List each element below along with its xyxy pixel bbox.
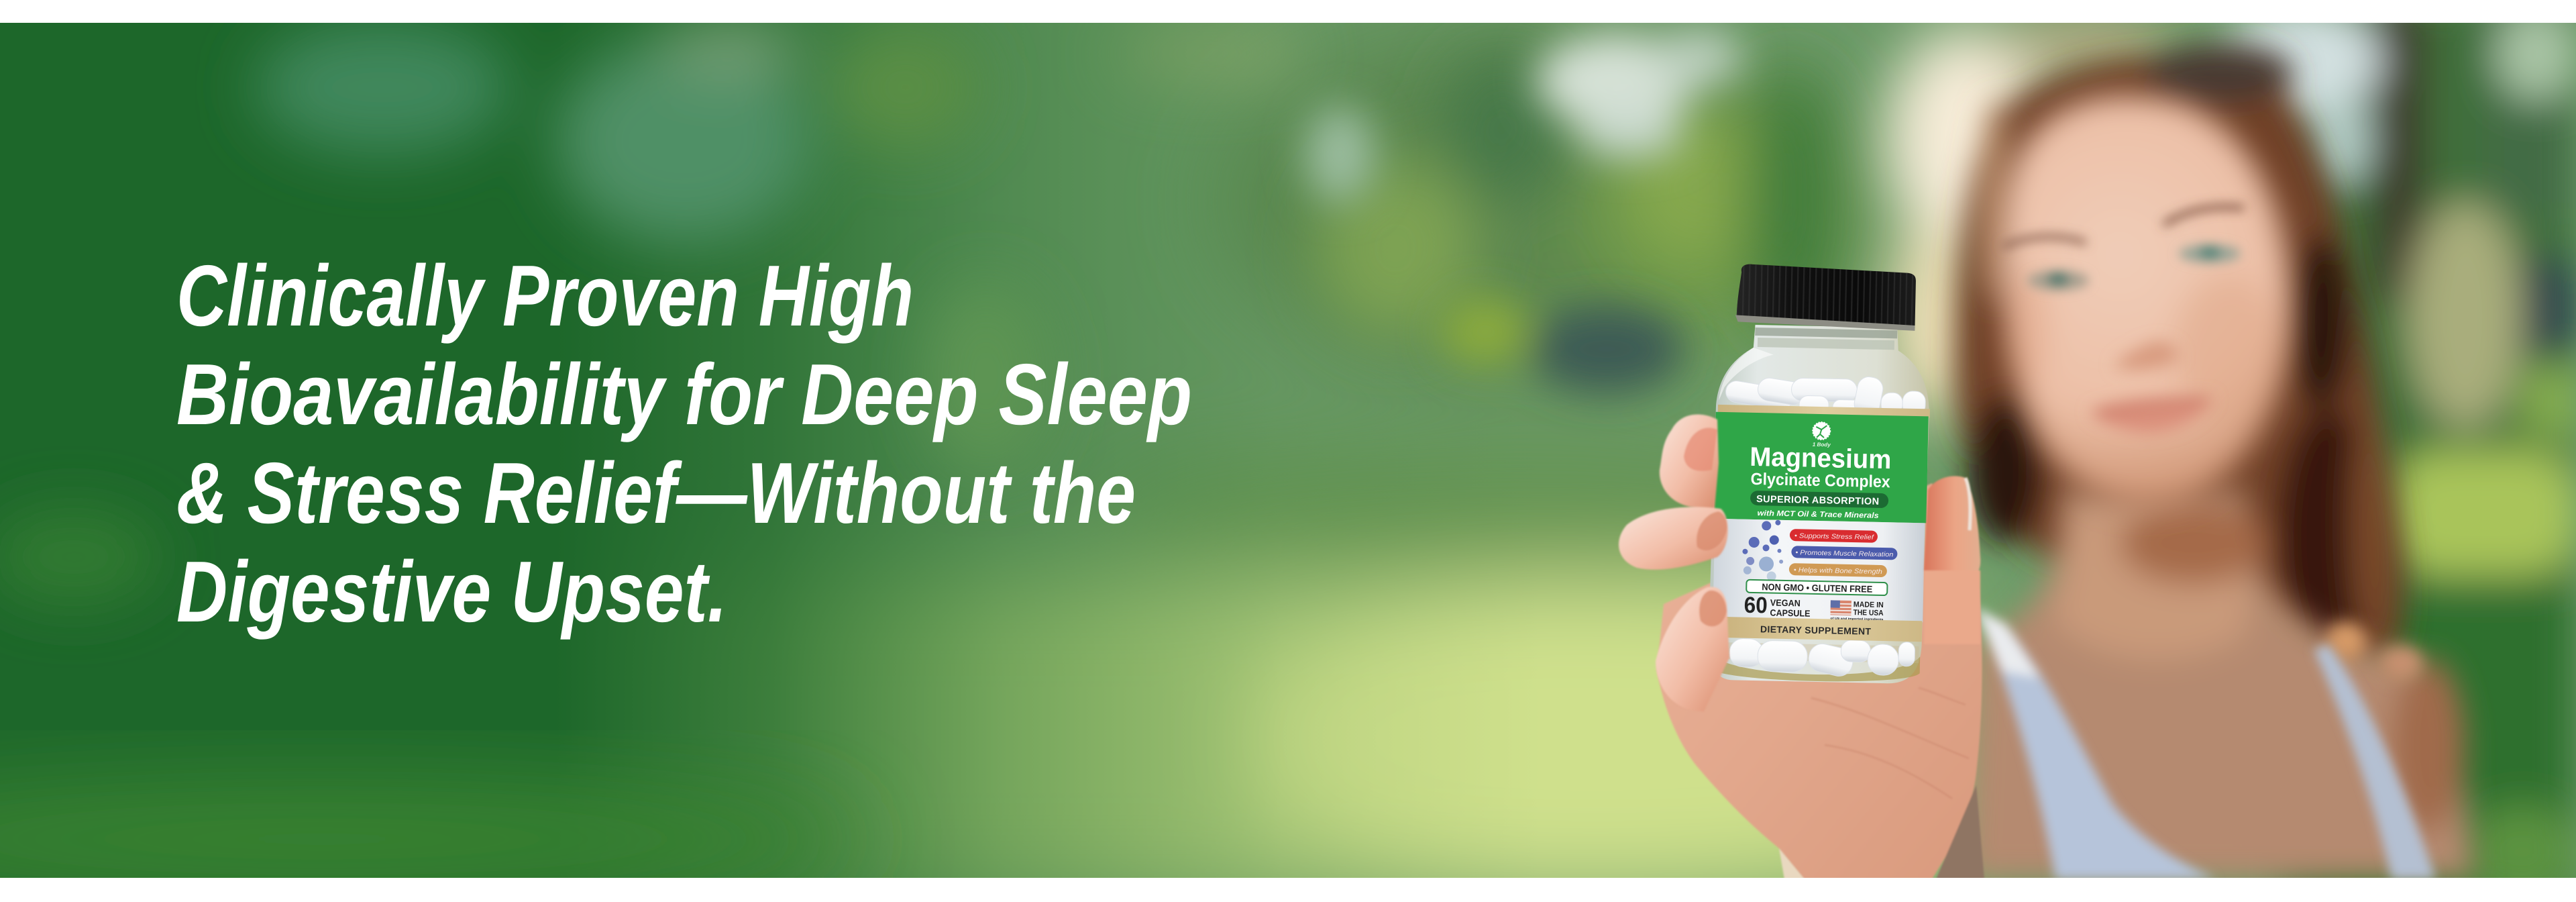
subtitle: with MCT Oil & Trace Minerals bbox=[1757, 509, 1879, 520]
eyes and brows bbox=[2002, 207, 2244, 291]
index finger bbox=[1660, 414, 1719, 508]
label bbox=[1711, 405, 1930, 642]
face bbox=[2001, 96, 2291, 506]
hair bbox=[1955, 44, 2404, 671]
headline: Digestive Upset. bbox=[176, 544, 727, 640]
benefit pills: • Helps with Bone Strength bbox=[1794, 566, 1882, 576]
nose and mouth bbox=[2090, 342, 2214, 433]
middle finger bbox=[1619, 507, 1728, 570]
capsules top bbox=[1724, 372, 1926, 419]
benefit pills: • Promotes Muscle Relaxation bbox=[1795, 549, 1894, 558]
supplement bottle bbox=[1707, 264, 1933, 684]
capsules bottom bbox=[1729, 638, 1915, 680]
usa flag and made in usa: MADE IN bbox=[1854, 601, 1884, 609]
white tank top bbox=[1975, 607, 2436, 879]
headline bbox=[176, 248, 1192, 640]
headline: Bioavailability for Deep Sleep bbox=[176, 346, 1192, 443]
shoulders and neck bbox=[1966, 490, 2475, 879]
thumb bbox=[1924, 476, 1980, 583]
usa flag and made in usa bbox=[1830, 600, 1884, 621]
lower finger bbox=[1656, 587, 1729, 711]
product name: Magnesium bbox=[1750, 442, 1892, 474]
superior absorption pill: SUPERIOR ABSORPTION bbox=[1756, 494, 1879, 507]
fingers holding bottle bbox=[1619, 414, 1980, 711]
sunlit hair halo bbox=[1885, 23, 2180, 423]
60 vegan capsule bbox=[1743, 593, 1811, 619]
superior absorption pill bbox=[1750, 491, 1888, 508]
glass jar bbox=[1707, 324, 1931, 684]
green label panel bbox=[1713, 412, 1929, 523]
usa flag and made in usa: THE USA bbox=[1853, 609, 1884, 617]
right side trees bbox=[2220, 0, 2576, 902]
dietary supplement: DIETARY SUPPLEMENT bbox=[1760, 623, 1872, 637]
non gmo box: NON GMO • GLUTEN FREE bbox=[1762, 581, 1872, 595]
gold bottom band bbox=[1719, 617, 1922, 642]
hand palm behind bottle bbox=[1657, 483, 1984, 879]
woman in background bbox=[1885, 23, 2475, 879]
60 vegan capsule: CAPSULE bbox=[1770, 608, 1811, 619]
benefit pills: • Supports Stress Relief bbox=[1794, 532, 1874, 542]
logo bbox=[1813, 422, 1831, 448]
logo: 1 Body bbox=[1813, 442, 1831, 448]
60 vegan capsule: VEGAN bbox=[1770, 598, 1801, 608]
60 vegan capsule: 60 bbox=[1743, 593, 1768, 618]
product name: Glycinate Complex bbox=[1750, 470, 1890, 491]
headline: & Stress Relief—Without the bbox=[176, 445, 1136, 542]
molecule graphic bbox=[1742, 519, 1784, 581]
left green gradient overlay bbox=[0, 23, 1425, 878]
headline: Clinically Proven High bbox=[176, 248, 914, 344]
usa flag and made in usa: of US and imported ingredients bbox=[1830, 616, 1884, 621]
gold top band bbox=[1718, 405, 1930, 417]
bokeh spots by shoulder bbox=[2326, 622, 2423, 681]
benefit pills bbox=[1789, 529, 1898, 577]
white panel bbox=[1713, 519, 1925, 622]
product name bbox=[1749, 442, 1892, 491]
black cap bbox=[1735, 264, 1916, 331]
